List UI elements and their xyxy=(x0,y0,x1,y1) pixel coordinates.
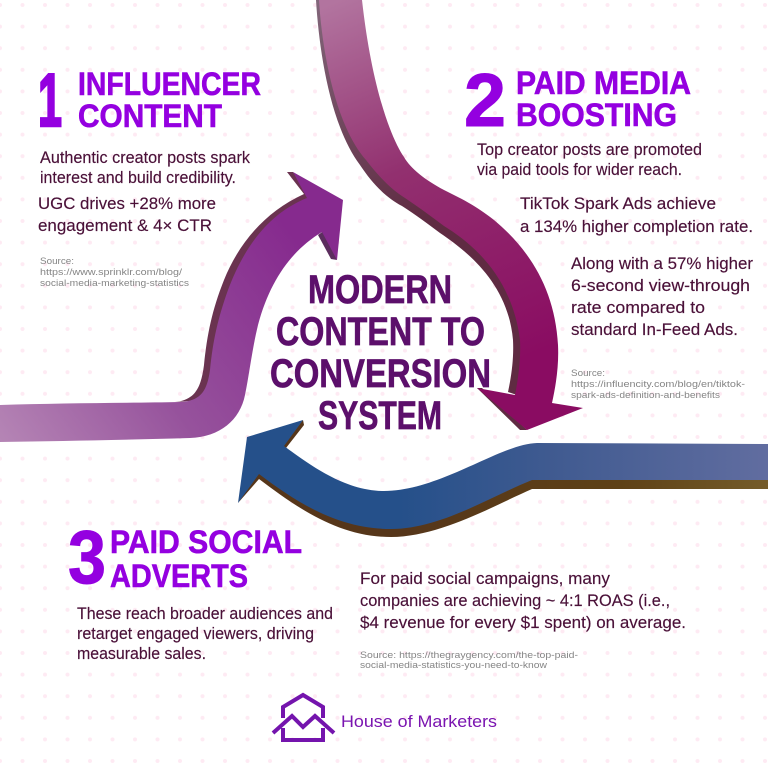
text: TikTok statistic xyxy=(520,194,753,236)
source 2: Source: xyxy=(571,368,605,379)
text: TikTok statistic: a 134% higher completion rate. xyxy=(520,217,753,236)
center title: SYSTEM xyxy=(318,394,442,438)
text: description: Authentic creator posts spark xyxy=(40,148,250,167)
source 1: https://www.sprinklr.com/blog/ xyxy=(40,267,182,278)
text: description: retarget engaged viewers, driving xyxy=(77,624,314,643)
text: UGC statistic: engagement & 4× CTR xyxy=(38,216,212,235)
heading: influencer content: CONTENT xyxy=(78,98,222,134)
logo: House of Marketers xyxy=(273,695,497,740)
text: view-through statistic xyxy=(571,254,753,339)
source 1: Source: xyxy=(40,256,74,267)
text: ROAS statistic: companies are achieving ~ 4:1 ROAS (i.e., xyxy=(360,591,670,610)
center title: CONVERSION xyxy=(270,352,491,396)
number 1: 1 xyxy=(38,58,62,142)
text: description: Top creator posts are promoted xyxy=(477,140,702,159)
text: description xyxy=(40,148,250,187)
text: description xyxy=(77,604,333,663)
section 2: paid media boosting xyxy=(464,58,753,401)
source 2: spark-ads-definition-and-benefits xyxy=(571,390,720,401)
heading: paid social adverts xyxy=(110,524,302,594)
text: view-through statistic: standard In-Feed Ads. xyxy=(571,320,738,339)
text: ROAS statistic: $4 revenue for every $1 spent) on average. xyxy=(360,613,686,632)
text: description: interest and build credibility. xyxy=(40,168,236,187)
section 3: paid social adverts xyxy=(68,515,686,671)
arrow: paid media to paid social xyxy=(316,0,583,430)
heading: influencer content: INFLUENCER xyxy=(78,66,261,102)
heading: paid media boosting: PAID MEDIA xyxy=(516,65,691,101)
source 1: social-media-marketing-statistics xyxy=(40,278,189,289)
text: description: measurable sales. xyxy=(77,644,206,663)
number 2: 2 xyxy=(464,58,506,142)
heading: influencer content xyxy=(78,66,261,134)
center title: MODERN xyxy=(308,268,452,312)
arrow: influencer content to paid media xyxy=(0,172,343,442)
number 3: 3 xyxy=(68,515,106,599)
text: TikTok statistic: TikTok Spark Ads achieve xyxy=(520,194,716,213)
text: ROAS statistic xyxy=(360,569,686,632)
source 2 xyxy=(571,368,745,401)
text: view-through statistic: 6-second view-through xyxy=(571,276,750,295)
text: UGC statistic xyxy=(38,194,216,235)
text: description xyxy=(477,140,702,179)
source 3: Source: https://thegraygency.com/the-top-paid- xyxy=(360,650,578,661)
source 3 xyxy=(360,650,578,671)
section 1: influencer content xyxy=(38,58,261,289)
text: description: via paid tools for wider reach. xyxy=(477,160,682,179)
icon: house xyxy=(273,695,334,740)
text: UGC statistic: UGC drives +28% more xyxy=(38,194,216,213)
source 2: https://influencity.com/blog/en/tiktok- xyxy=(571,379,745,390)
text: view-through statistic: Along with a 57% higher xyxy=(571,254,753,273)
text: ROAS statistic: For paid social campaigns, many xyxy=(360,569,610,588)
source 3: social-media-statistics-you-need-to-know xyxy=(360,660,547,671)
text: description: These reach broader audiences and xyxy=(77,604,333,623)
arrow: paid social return xyxy=(238,420,768,537)
source 1 xyxy=(40,256,189,289)
center title: CONTENT TO xyxy=(276,310,485,354)
heading: paid social adverts: ADVERTS xyxy=(110,558,248,594)
logo wordmark: House of Marketers xyxy=(341,712,497,731)
center title xyxy=(270,268,491,438)
heading: paid media boosting: BOOSTING xyxy=(516,97,677,133)
heading: paid media boosting xyxy=(516,65,691,133)
text: view-through statistic: rate compared to xyxy=(571,298,705,317)
heading: paid social adverts: PAID SOCIAL xyxy=(110,524,302,560)
